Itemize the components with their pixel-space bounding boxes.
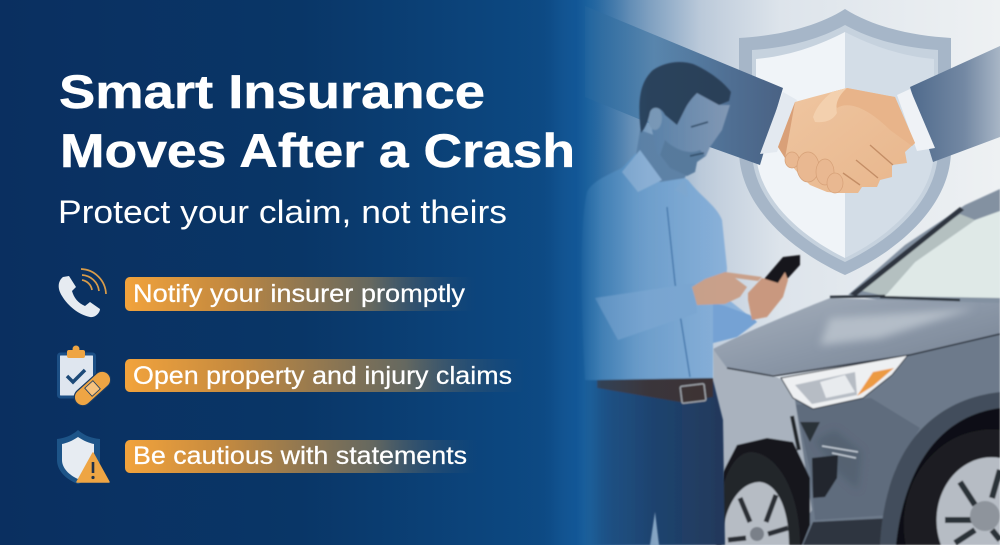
shirt placket [667,207,690,377]
title: Smart Insurance [59,65,485,118]
shield emblem [739,9,951,275]
handshake [778,88,915,193]
icon: clipboard with bandage [58,346,114,409]
grille [812,455,838,498]
far wheel arch [880,392,1000,545]
right suit sleeve and cuff [897,46,1000,162]
phone [752,255,800,297]
neck [636,130,695,182]
near wheel arch [716,438,810,545]
belt buckle [680,384,706,403]
near wheel tire [716,452,800,545]
eyes and mouth [690,122,708,156]
car [713,189,1000,545]
car hood [713,298,1000,375]
label text: Open property and injury claims [133,362,512,390]
title: Moves After a Crash [60,124,575,177]
label pill [125,277,477,311]
hair [639,62,731,133]
holding hand [748,272,788,320]
right collar [675,177,688,197]
far wheel spokes [945,470,1000,543]
left collar [622,150,662,192]
far wheel rim [937,457,1000,545]
car body side [790,330,1000,545]
icon: phone with signal [59,269,106,317]
lower bumper [803,518,892,545]
label pill [125,359,525,392]
left suit sleeve and cuff [585,6,797,165]
trousers [585,380,725,545]
label text: Notify your insurer promptly [133,280,466,308]
icon: shield with warning triangle [57,430,109,484]
title [59,65,575,177]
ear [648,106,662,130]
headlight [781,355,908,409]
man [581,62,800,545]
near wheel rim [722,482,789,545]
near wheel spokes [728,495,788,540]
belt [597,378,713,402]
subtitle: Protect your claim, not theirs [58,194,507,230]
shirt [581,152,757,381]
forearm sleeve [595,283,697,340]
windscreen wipers [830,296,960,300]
item 1: notify insurer [59,269,477,317]
far wheel tire [904,430,1000,545]
car roof and windscreen [848,189,1000,305]
label text: Be cautious with statements [133,442,467,470]
left edge fade over photo [540,0,720,545]
item 2: open claims [58,346,525,409]
far sleeve [713,303,757,343]
bumper damage [815,430,862,490]
beard shadow [660,140,705,176]
near wheel hub [750,527,764,541]
car near fender [713,350,812,545]
pointing hand [692,272,762,305]
item 3: cautious statements [57,430,479,484]
face [652,93,730,176]
far wheel hub [970,501,1000,531]
label pill [125,440,479,473]
